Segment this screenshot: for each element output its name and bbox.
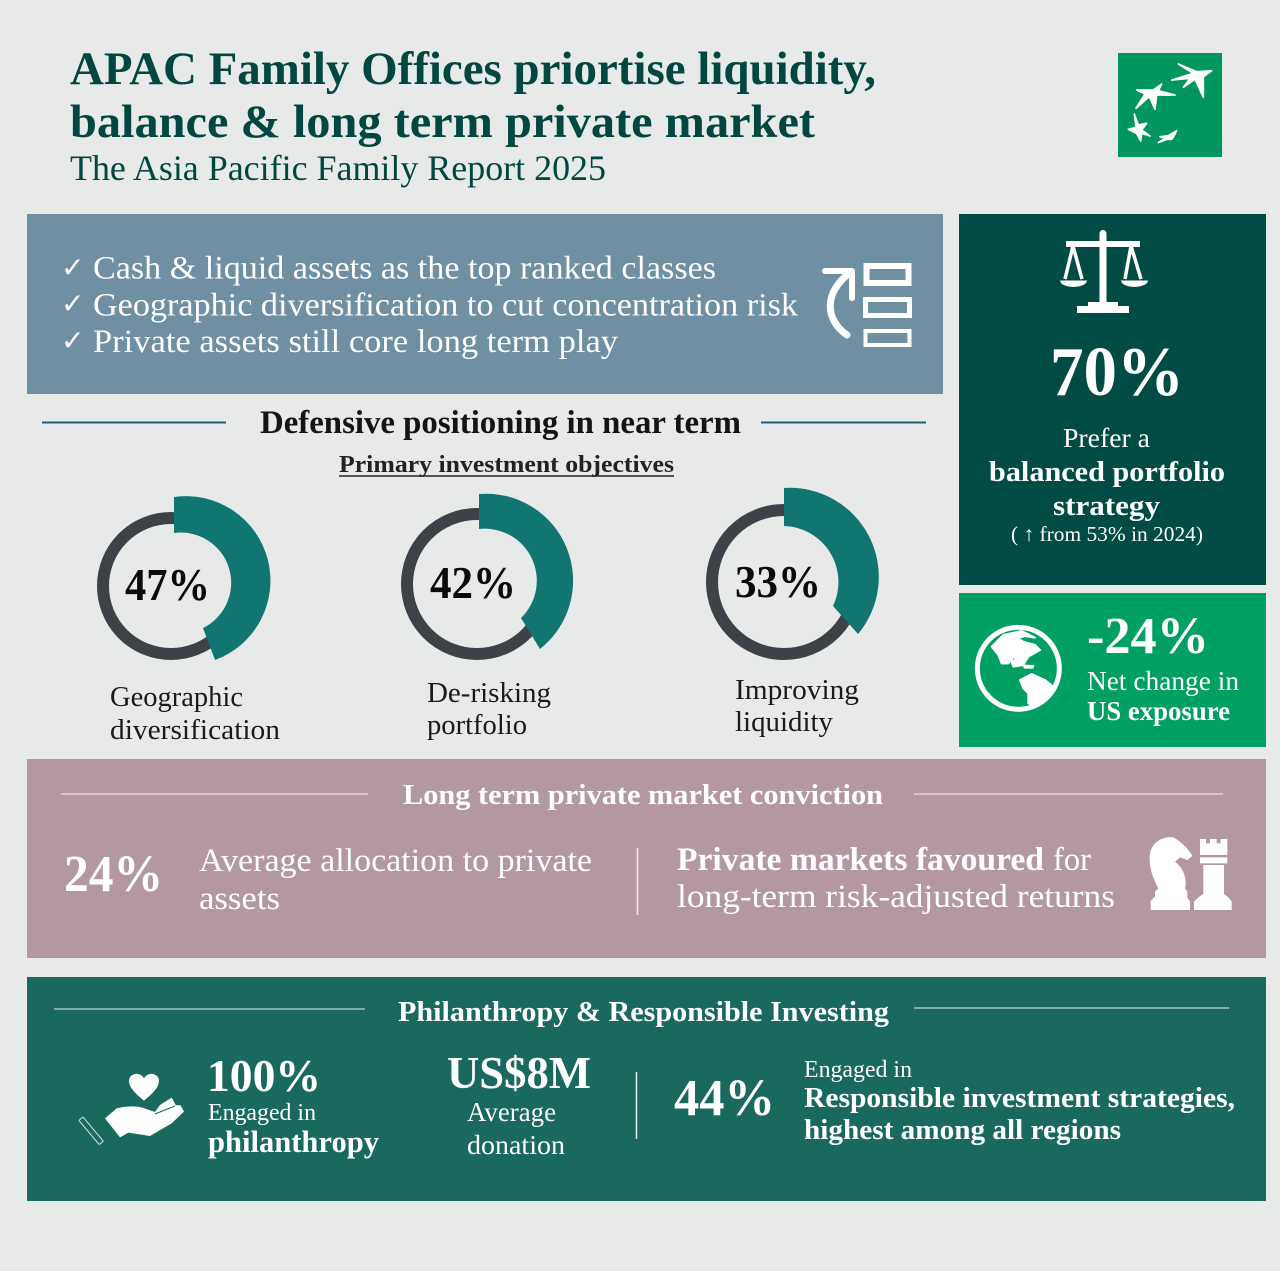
title: APAC Family Offices priortise liquidity, bbox=[70, 43, 876, 95]
responsible investment text: highest among all regions bbox=[804, 1114, 1121, 1146]
stat: US$8M average donation: US$8M bbox=[447, 1047, 591, 1098]
average allocation text: Average allocation to private bbox=[199, 843, 592, 879]
heading: defensive positioning: Defensive positioning in near term bbox=[260, 405, 741, 441]
private markets favoured text bbox=[677, 842, 1115, 915]
takeaway list: Cash & liquid assets as the top ranked classes bbox=[93, 250, 716, 286]
stat: 100% engaged in philanthropy: philanthropy bbox=[208, 1124, 379, 1159]
stat: US$8M average donation: donation bbox=[467, 1130, 566, 1160]
stat: -24%: -24% bbox=[1087, 608, 1209, 665]
label: geographic diversification bbox=[110, 682, 280, 746]
label: geographic diversification: diversification bbox=[110, 715, 280, 746]
stat: 24%: 24% bbox=[64, 846, 163, 903]
icon: globe bbox=[977, 627, 1059, 709]
takeaway list: ✓ bbox=[61, 287, 84, 320]
US exposure text: Net change in bbox=[1087, 666, 1240, 696]
stat: 100% engaged in philanthropy bbox=[207, 1050, 379, 1159]
label: improving liquidity bbox=[735, 675, 859, 738]
takeaway list: Private assets still core long term play bbox=[93, 324, 619, 360]
stat: 100% engaged in philanthropy: 100% bbox=[207, 1050, 321, 1101]
takeaway list: Geographic diversification to cut concentration risk bbox=[93, 288, 799, 324]
icon: chess pieces bbox=[1150, 837, 1232, 910]
donut: de-risking portfolio 42%: 42% bbox=[430, 557, 516, 608]
subtitle: The Asia Pacific Family Report 2025 bbox=[70, 148, 606, 188]
stat: US$8M average donation: Average bbox=[467, 1097, 556, 1127]
label: improving liquidity: Improving bbox=[735, 675, 859, 706]
title: balance & long term private market bbox=[70, 96, 815, 148]
balanced portfolio text: ( ↑ from 53% in 2024) bbox=[1011, 522, 1203, 546]
responsible investment text bbox=[804, 1057, 1235, 1146]
icon: scales bbox=[1060, 230, 1148, 313]
stat: 100% engaged in philanthropy: Engaged in bbox=[208, 1100, 316, 1126]
donut: improving liquidity 33% bbox=[712, 488, 879, 654]
donut: geographic diversification 47% bbox=[103, 496, 270, 660]
takeaway list bbox=[61, 250, 799, 360]
balanced portfolio text: balanced portfolio bbox=[989, 456, 1225, 488]
heading: philanthropy and responsible investing: Philanthropy & Responsible Investing bbox=[398, 996, 890, 1028]
responsible investment text: Responsible investment strategies, bbox=[804, 1082, 1235, 1114]
donut: de-risking portfolio 42% bbox=[407, 494, 573, 654]
balanced portfolio text bbox=[989, 423, 1225, 546]
label: de-risking portfolio bbox=[427, 678, 551, 741]
title bbox=[70, 43, 876, 148]
private markets favoured text: Private markets favoured bbox=[677, 842, 1044, 878]
label: de-risking portfolio: De-risking bbox=[427, 678, 551, 709]
label: improving liquidity: liquidity bbox=[735, 707, 833, 738]
panel: philanthropy and responsible investing bbox=[27, 977, 1266, 1201]
private markets favoured text: long-term risk-adjusted returns bbox=[677, 879, 1115, 915]
donut: improving liquidity 33%: 33% bbox=[735, 556, 821, 607]
balanced portfolio text: strategy bbox=[1053, 490, 1161, 522]
panel: private market conviction bbox=[27, 759, 1266, 958]
takeaway list: ✓ bbox=[61, 324, 84, 357]
responsible investment text: Engaged in bbox=[804, 1057, 912, 1083]
icon: bank logo bbox=[1118, 53, 1222, 157]
heading: long term private market conviction: Long term private market conviction bbox=[403, 779, 883, 811]
average allocation text: assets bbox=[199, 881, 280, 917]
average allocation text bbox=[199, 843, 592, 917]
stat: US$8M average donation bbox=[447, 1047, 591, 1160]
subheading: primary investment objectives: Primary investment objectives bbox=[339, 452, 674, 478]
icon: hand holding heart bbox=[79, 1074, 184, 1145]
donut: geographic diversification 47%: 47% bbox=[125, 559, 210, 610]
US exposure text bbox=[1087, 666, 1240, 726]
label: geographic diversification: Geographic bbox=[110, 682, 243, 713]
stat: 44%: 44% bbox=[674, 1070, 775, 1127]
panel: US exposure bbox=[959, 593, 1266, 747]
icon: rebalancing list bbox=[825, 266, 910, 345]
US exposure text: US exposure bbox=[1087, 696, 1230, 726]
panel: key takeaways bbox=[27, 214, 943, 394]
label: de-risking portfolio: portfolio bbox=[427, 710, 527, 741]
stat: 70%: 70% bbox=[1050, 334, 1184, 411]
takeaway list: ✓ bbox=[61, 251, 84, 284]
balanced portfolio text: Prefer a bbox=[1063, 423, 1150, 453]
panel: balanced portfolio bbox=[959, 214, 1266, 585]
private markets favoured text: for bbox=[1053, 842, 1091, 878]
